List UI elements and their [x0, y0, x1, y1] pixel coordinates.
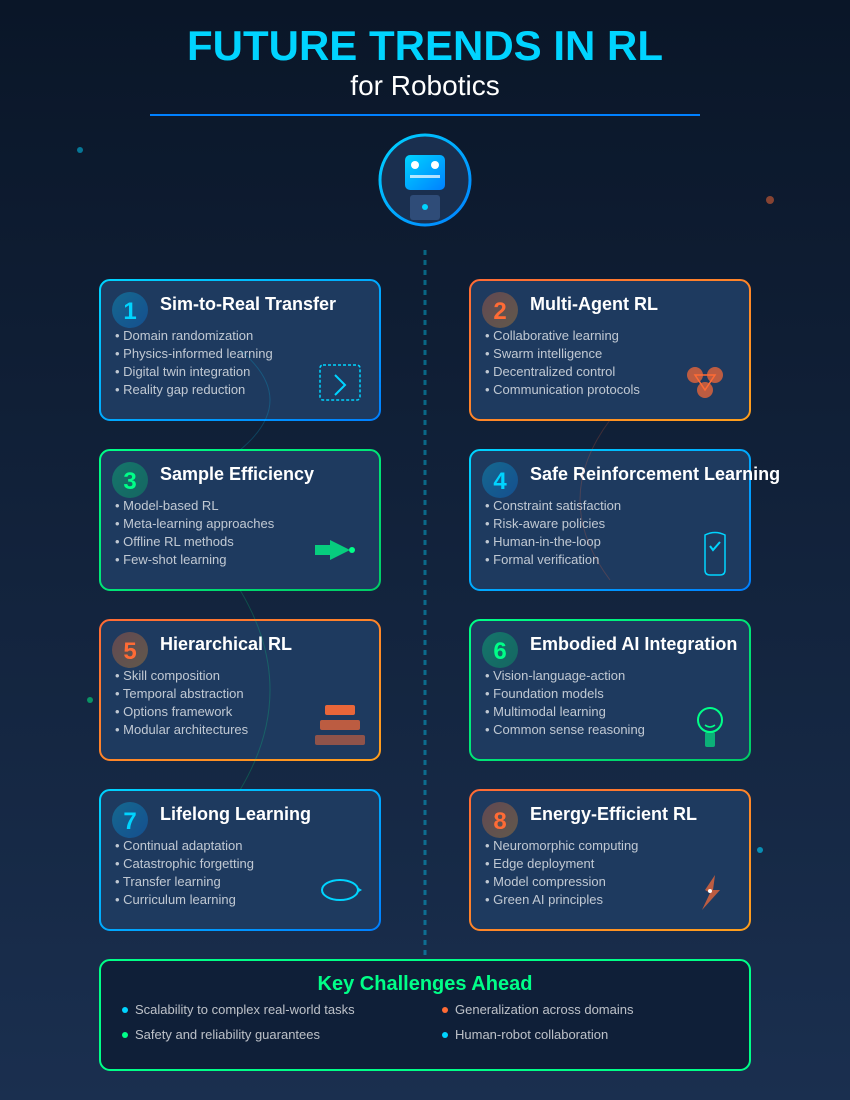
heading: Energy-Efficient RL	[530, 804, 697, 824]
bullet list: • Multimodal learning	[485, 704, 606, 719]
challenge: collaboration: Human-robot collaboration	[455, 1027, 608, 1042]
bullet list: • Model compression	[485, 874, 606, 889]
number badge 4: 4	[493, 468, 507, 495]
bullet list: • Common sense reasoning	[485, 722, 645, 737]
decorative dot: top left	[77, 147, 83, 153]
number badge 7	[112, 802, 148, 838]
panel: card 4 safe reinforcement learning	[470, 450, 780, 590]
number badge 8	[482, 802, 518, 838]
number badge 1	[112, 292, 148, 328]
icon: stacked layers	[315, 705, 365, 745]
icon: three agents	[687, 367, 723, 398]
header divider	[150, 114, 700, 116]
number badge 6: 6	[493, 638, 507, 665]
bullet list	[485, 498, 621, 567]
bullet list: • Vision-language-action	[485, 668, 625, 683]
challenge: generalization: Generalization across domains	[455, 1002, 634, 1017]
bullet list: • Human-in-the-loop	[485, 534, 601, 549]
bullet list: • Options framework	[115, 704, 233, 719]
number badge 5: 5	[123, 638, 137, 665]
number badge 2: 2	[493, 298, 507, 325]
panel: card 1 sim-to-real transfer	[100, 280, 380, 420]
bullet list: • Neuromorphic computing	[485, 838, 638, 853]
bullet list: • Decentralized control	[485, 364, 615, 379]
icon: lightning bolt	[702, 875, 720, 910]
decorative dot: top right	[766, 196, 774, 204]
bullet list: • Risk-aware policies	[485, 516, 606, 531]
challenge: safety: Safety and reliability guarantees	[135, 1027, 321, 1042]
panel: card 5 hierarchical RL	[100, 620, 380, 760]
bullet list: • Transfer learning	[115, 874, 221, 889]
bullet list: • Catastrophic forgetting	[115, 856, 254, 871]
bullet list	[115, 838, 254, 907]
number badge 3: 3	[123, 468, 137, 495]
decorative dot: middle left	[87, 697, 93, 703]
bullet list: • Continual adaptation	[115, 838, 242, 853]
challenge: scalability: Scalability to complex real-world tasks	[135, 1002, 355, 1017]
icon: dashed frame with chevron	[320, 365, 360, 400]
subtitle: for Robotics	[350, 70, 500, 101]
bullet list: • Skill composition	[115, 668, 220, 683]
number badge 7: 7	[123, 808, 137, 835]
bullet list	[485, 328, 640, 397]
bullet list: • Temporal abstraction	[115, 686, 244, 701]
bullet list: • Green AI principles	[485, 892, 603, 907]
number badge 1: 1	[123, 298, 137, 325]
title: FUTURE TRENDS IN RL	[187, 22, 663, 69]
connector: card 1 curve	[240, 350, 270, 450]
number badge 8: 8	[493, 808, 507, 835]
bullet list: • Formal verification	[485, 552, 599, 567]
bullet list: • Domain randomization	[115, 328, 253, 343]
icon: loop	[322, 880, 362, 900]
bullet list: • Constraint satisfaction	[485, 498, 621, 513]
decorative dot: lower right	[757, 847, 763, 853]
bullet list: • Collaborative learning	[485, 328, 619, 343]
number badge 4	[482, 462, 518, 498]
icon: shield with check	[705, 532, 725, 575]
panel: card 2 multi-agent RL	[470, 280, 750, 420]
bullet list: • Meta-learning approaches	[115, 516, 275, 531]
icon: robot	[380, 135, 470, 225]
bullet list: • Digital twin integration	[115, 364, 250, 379]
heading: Sim-to-Real Transfer	[160, 294, 336, 314]
heading: Safe Reinforcement Learning	[530, 464, 780, 484]
bullet list: • Offline RL methods	[115, 534, 234, 549]
heading: Hierarchical RL	[160, 634, 292, 654]
bullet list: • Physics-informed learning	[115, 346, 273, 361]
bullet list	[115, 328, 273, 397]
number badge 2	[482, 292, 518, 328]
panel: card 8 energy-efficient RL	[470, 790, 750, 930]
panel: card 7 lifelong learning	[100, 790, 380, 930]
bullet list: • Curriculum learning	[115, 892, 236, 907]
icon: embodied head	[698, 708, 722, 747]
number badge 3	[112, 462, 148, 498]
bullet list: • Few-shot learning	[115, 552, 226, 567]
bullet list: • Foundation models	[485, 686, 604, 701]
number badge 5	[112, 632, 148, 668]
bullet list	[485, 668, 645, 737]
heading: Lifelong Learning	[160, 804, 311, 824]
panel: card 3 sample efficiency	[100, 450, 380, 590]
bullet list: • Edge deployment	[485, 856, 595, 871]
number badge 6	[482, 632, 518, 668]
panel: card 6 embodied AI integration	[470, 620, 750, 760]
bullet list	[115, 498, 275, 567]
heading: Embodied AI Integration	[530, 634, 737, 654]
icon: arrow with dot	[315, 540, 355, 560]
bullet list: • Model-based RL	[115, 498, 219, 513]
heading: Key Challenges Ahead	[318, 973, 532, 995]
central timeline	[424, 250, 426, 960]
bullet list: • Swarm intelligence	[485, 346, 602, 361]
panel: key challenges	[100, 960, 750, 1070]
bullet list	[485, 838, 638, 907]
heading: Sample Efficiency	[160, 464, 314, 484]
connector: card 3 curve	[240, 590, 270, 790]
bullet list	[115, 668, 249, 737]
bullet list: • Communication protocols	[485, 382, 640, 397]
bullet list: • Reality gap reduction	[115, 382, 245, 397]
connector: card 2 curve	[580, 420, 610, 580]
heading: Multi-Agent RL	[530, 294, 658, 314]
bullet list: • Modular architectures	[115, 722, 249, 737]
